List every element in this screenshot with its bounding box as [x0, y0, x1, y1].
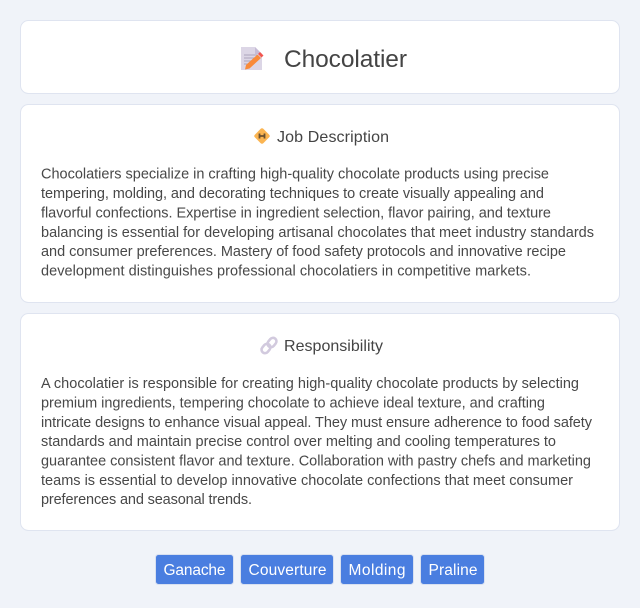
text block: responsibility: intricate designs to enhance visual appeal. They must ensure adherence to food safety	[41, 415, 593, 431]
tag: Couverture: Couverture	[248, 562, 326, 579]
tag: Ganache: Ganache	[164, 562, 226, 579]
text block: job description: flavorful confections. Expertise in ingredient selection, flavor pairing, and texture	[41, 206, 551, 222]
tag: Molding: Molding	[348, 562, 406, 579]
tag: Praline	[420, 554, 484, 584]
text block: job description: balancing is essential for developing artisanal chocolates that meet industry standards	[41, 225, 594, 241]
text block: job description: and consumer preferences. Mastery of food safety protocols and innovative recipe	[41, 244, 566, 260]
title: Chocolatier	[284, 46, 407, 73]
text block: responsibility: guarantee consistent flavor and texture. Collaboration with pastry chefs and marketing	[41, 454, 591, 470]
text block: responsibility: A chocolatier is responsible for creating high-quality chocolate products by selecting	[41, 376, 579, 392]
text block: responsibility: standards and maintain precise control over melting and cooling temperatures to	[41, 434, 556, 450]
text block: responsibility: premium ingredients, tempering chocolate to achieve ideal texture, and crafting	[41, 396, 545, 412]
tag: Molding	[340, 554, 414, 584]
text block: responsibility: teams is essential to develop innovative chocolate confections that meet consumer	[41, 473, 573, 489]
text block: responsibility	[41, 376, 593, 508]
tag: Ganache	[156, 554, 234, 584]
text block: job description: Chocolatiers specialize in crafting high-quality chocolate products using precise	[41, 166, 549, 182]
text block: job description: tempering, molding, and decorating techniques to create visually appealing and	[41, 186, 544, 202]
tags	[156, 554, 484, 584]
panel: responsibility	[20, 314, 620, 530]
icon: document with pencil	[241, 47, 264, 70]
icon: chain link	[260, 336, 278, 355]
panel: job description	[20, 104, 620, 302]
tag: Couverture	[240, 554, 334, 584]
tag: Praline: Praline	[428, 562, 478, 579]
icon: road sign diamond	[254, 128, 270, 144]
text block: responsibility: preferences and seasonal trends.	[41, 492, 252, 508]
panel: title card	[20, 20, 620, 94]
heading: job description: Job Description	[277, 129, 389, 146]
text block: job description	[41, 166, 594, 280]
heading: responsibility: Responsibility	[284, 338, 383, 355]
text block: job description: development distinguishes professional chocolatiers in competitive markets.	[41, 264, 531, 280]
